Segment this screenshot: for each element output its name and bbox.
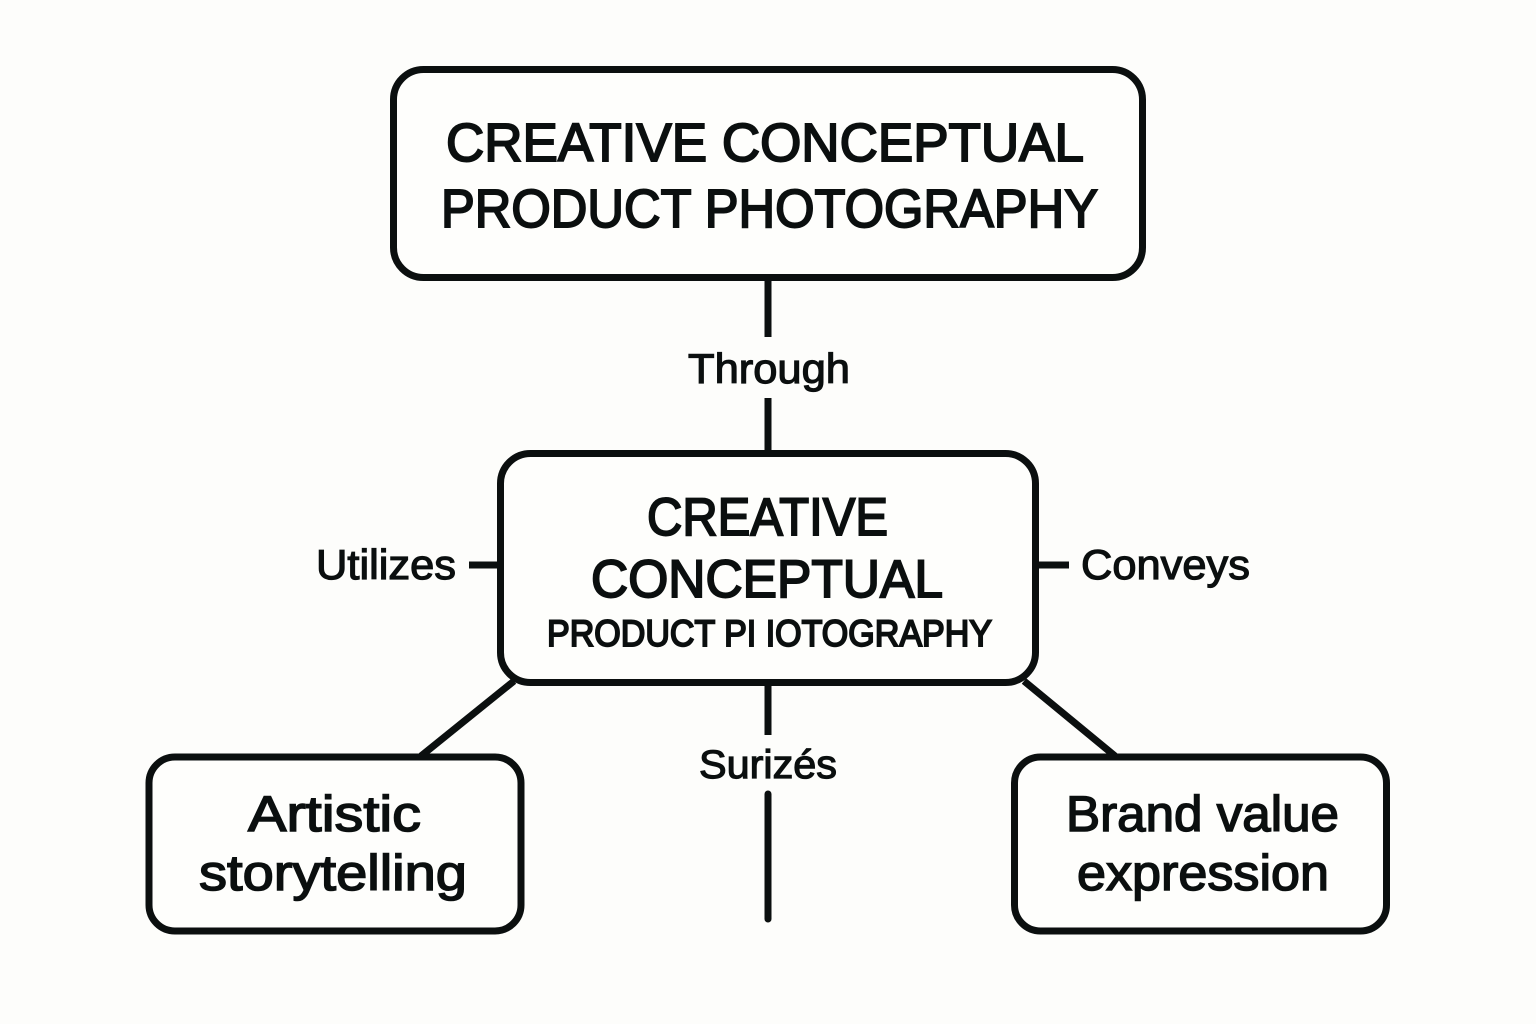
label: Conveys: Conveys	[1081, 541, 1250, 588]
connector: center box to Artistic storytelling	[421, 681, 514, 756]
panel: Artistic storytelling	[149, 757, 521, 931]
connector: center box to Conveys	[1037, 562, 1069, 568]
panel: top box	[394, 70, 1142, 278]
heading: top box title: CREATIVE CONCEPTUAL	[446, 113, 1084, 173]
text: Artistic storytelling: storytelling	[199, 845, 467, 901]
label: Utilizes: Utilizes	[316, 541, 456, 588]
panel: Brand value expression	[1014, 757, 1386, 931]
heading: center box title	[547, 488, 992, 654]
heading: top box title: PRODUCT PHOTOGRAPHY	[441, 179, 1098, 239]
text: Brand value expression: expression	[1077, 845, 1329, 901]
text: Artistic storytelling	[199, 786, 467, 901]
heading: top box title	[441, 113, 1098, 239]
text: Brand value expression: Brand value	[1066, 786, 1339, 842]
connector: center box to Surizés label	[764, 684, 772, 735]
connector: Surizés label downward	[764, 794, 772, 919]
connector: top box to Through label	[764, 278, 772, 337]
connector: Through label to center box	[764, 398, 772, 452]
heading: center box title: CONCEPTUAL	[591, 550, 943, 609]
connector: center box to Utilizes	[469, 562, 499, 568]
panel: center box	[500, 454, 1036, 682]
connector: center box to Brand value expression	[1024, 681, 1115, 756]
heading: center box title: PRODUCT PI IOTOGRAPHY	[547, 613, 992, 654]
heading: center box title: CREATIVE	[647, 488, 888, 547]
text: Brand value expression	[1066, 786, 1339, 901]
label: Surizés: Surizés	[699, 743, 837, 787]
text: Artistic storytelling: Artistic	[248, 786, 421, 842]
label: Through: Through	[688, 345, 850, 392]
